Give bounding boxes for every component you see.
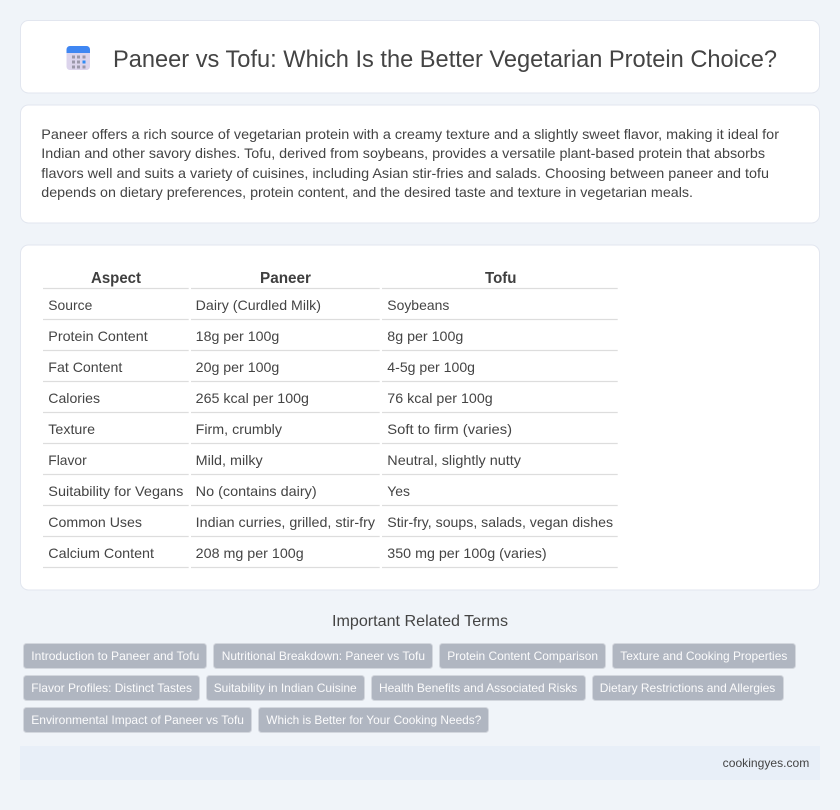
tag: Texture and Cooking Properties (620, 649, 787, 663)
tag: Which is Better for Your Cooking Needs? (266, 713, 482, 727)
tag: Suitability in Indian Cuisine (214, 681, 357, 695)
row: protein content: 18g per 100g (196, 328, 279, 344)
row: calories: 76 kcal per 100g (387, 390, 493, 406)
row: flavor: Flavor (48, 452, 87, 468)
tag (24, 708, 252, 732)
row: calcium content (48, 545, 547, 561)
tag (206, 676, 364, 700)
row: flavor: Neutral, slightly nutty (387, 452, 521, 468)
tag (372, 676, 586, 700)
tag (24, 676, 200, 700)
row: texture: Firm, crumbly (196, 421, 282, 437)
table header row (91, 270, 516, 287)
row: texture: Texture (48, 421, 95, 437)
row: fat content: 4-5g per 100g (387, 359, 475, 375)
text block: introduction paragraph: flavors well and suits a variety of cuisines, including Asian stir-fries and salads. Choosing between paneer and tofu (41, 165, 769, 181)
tag: Protein Content Comparison (447, 649, 598, 663)
row: flavor (48, 452, 521, 468)
footer: cookingyes.com (723, 756, 809, 770)
tag: Environmental Impact of Paneer vs Tofu (31, 713, 244, 727)
panel: header (20, 20, 820, 93)
heading: important related terms: Important Related Terms (332, 613, 508, 630)
row: calories: 265 kcal per 100g (196, 390, 309, 406)
tag: Introduction to Paneer and Tofu (31, 649, 199, 663)
tag group: related terms (24, 644, 796, 732)
tag (592, 676, 784, 700)
row: suitability for vegans: No (contains dairy) (196, 483, 317, 499)
icon: calendar grid (66, 46, 90, 70)
row: source: Source (48, 297, 93, 313)
text block: introduction paragraph (41, 126, 779, 200)
panel: introduction (20, 105, 820, 223)
row: suitability for vegans: Suitability for Vegans (48, 483, 183, 499)
row: protein content (48, 328, 463, 344)
tag (24, 644, 206, 668)
row: flavor: Mild, milky (196, 452, 263, 468)
row: calories (48, 390, 493, 406)
row: common uses: Indian curries, grilled, stir-fry (196, 514, 375, 530)
footer (20, 746, 820, 780)
table header row: Tofu (485, 270, 516, 287)
row: source (48, 297, 449, 313)
row: suitability for vegans (48, 483, 410, 499)
tag: Nutritional Breakdown: Paneer vs Tofu (222, 649, 425, 663)
row: common uses (48, 514, 613, 530)
tag: Dietary Restrictions and Allergies (600, 681, 775, 695)
row: protein content: Protein Content (48, 328, 148, 344)
row: texture: Soft to firm (varies) (387, 421, 512, 437)
table header row: Paneer (260, 270, 311, 287)
row: source: Soybeans (387, 297, 449, 313)
row: suitability for vegans: Yes (387, 483, 410, 499)
tag: Health Benefits and Associated Risks (379, 681, 577, 695)
row: calcium content: 208 mg per 100g (196, 545, 304, 561)
text block: introduction paragraph: depends on dietary preferences, protein content, and the desired taste and texture in vegetarian meals. (41, 184, 693, 200)
tag (612, 644, 796, 668)
row: source: Dairy (Curdled Milk) (196, 297, 321, 313)
row: common uses: Common Uses (48, 514, 142, 530)
row: protein content: 8g per 100g (387, 328, 463, 344)
tag (258, 708, 488, 732)
row: calories: Calories (48, 390, 100, 406)
row: calcium content: 350 mg per 100g (varies) (387, 545, 547, 561)
row: fat content: Fat Content (48, 359, 122, 375)
tag (214, 644, 432, 668)
title: Paneer vs Tofu: Which Is the Better Vegetarian Protein Choice? (113, 46, 777, 73)
panel: comparison table (20, 245, 820, 590)
tag: Flavor Profiles: Distinct Tastes (31, 681, 192, 695)
text block: introduction paragraph: Indian and other savory dishes. Tofu, derived from soybeans, provides a versatile plant-based protein that absorbs (41, 145, 765, 161)
row: fat content: 20g per 100g (196, 359, 279, 375)
tag (440, 644, 606, 668)
row: calcium content: Calcium Content (48, 545, 154, 561)
row: fat content (48, 359, 475, 375)
table header row: Aspect (91, 270, 142, 287)
row: texture (48, 421, 512, 437)
row: common uses: Stir-fry, soups, salads, vegan dishes (387, 514, 613, 530)
text block: introduction paragraph: Paneer offers a rich source of vegetarian protein with a creamy texture and a slightly sweet flavor, making it ideal for (41, 126, 779, 142)
